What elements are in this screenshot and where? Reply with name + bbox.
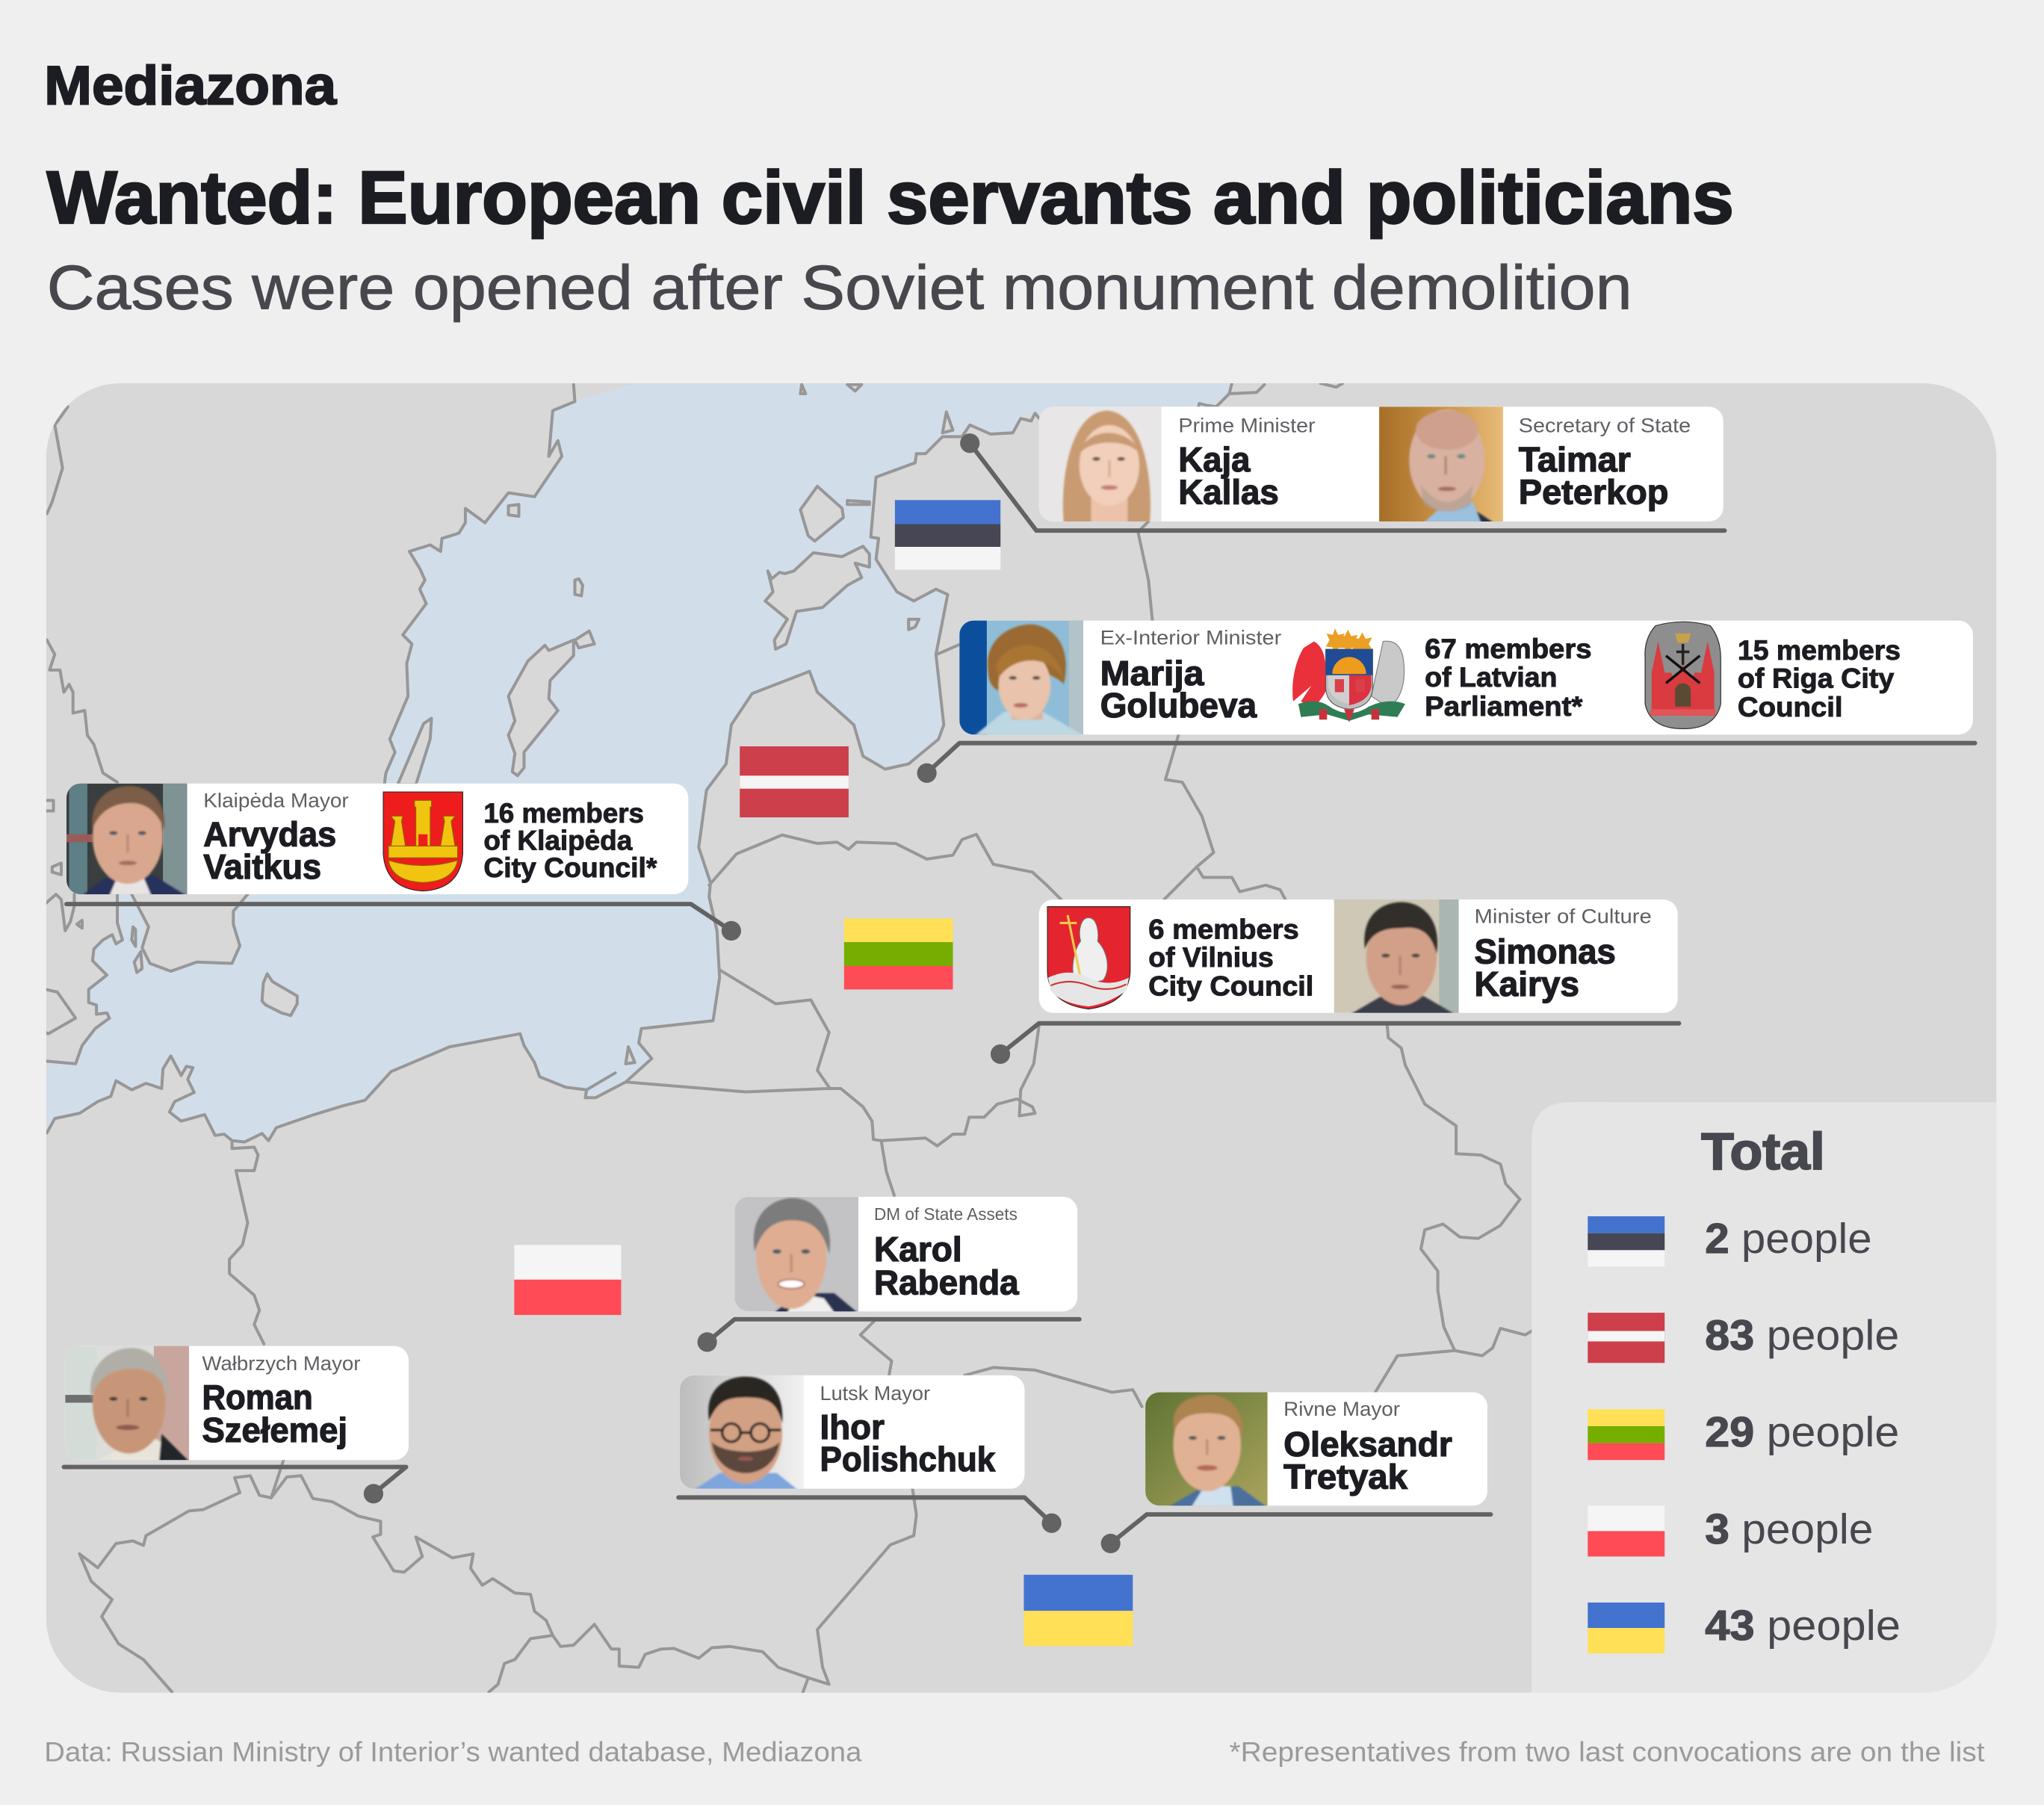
name: Arvydas Vaitkus: Arvydas — [203, 814, 336, 853]
flag on map: Ukraine — [1023, 1575, 1133, 1646]
text: 67 members of Latvian Parliament — [1425, 634, 1592, 722]
card: Lithuania Vilnius officials — [1039, 900, 1678, 1015]
photo: Taimar Peterkop — [1379, 406, 1503, 523]
name: Kaja Kallas: Kaja — [1178, 440, 1251, 479]
card: Latvia officials — [959, 621, 1973, 735]
role: Klaipeda Mayor: Klaipėda Mayor — [203, 790, 349, 812]
name: Roman Szelemej: Szełemej — [202, 1411, 347, 1449]
text: 15 members of Riga City Council: of Riga City — [1738, 663, 1895, 694]
photo: Kaja Kallas — [1039, 406, 1162, 523]
legend heading: Total — [1701, 1122, 1825, 1180]
icon: Vilnius coat of arms — [1047, 907, 1130, 1009]
text: 16 members of Klaipeda City Council: of Klaipėda — [483, 826, 633, 856]
role: Prime Minister: Prime Minister — [1178, 414, 1316, 436]
photo: Arvydas Vaitkus — [66, 784, 187, 896]
text: 15 members of Riga City Council: Council — [1738, 692, 1843, 722]
title: Wanted: European civil servants and politicians — [47, 156, 1734, 239]
name: Marija Golubeva: Golubeva — [1100, 686, 1257, 725]
leader line: Ihor Polishchuk — [678, 1497, 1062, 1533]
name: Karol Rabenda: Rabenda — [874, 1263, 1019, 1301]
legend row: Estonia — [1588, 1216, 1872, 1266]
name: Arvydas Vaitkus — [203, 814, 336, 886]
flag on map: Latvia — [740, 746, 849, 817]
photo: Oleksandr Tretyak — [1145, 1393, 1268, 1507]
role: Walbrzych Mayor: Wałbrzych Mayor — [202, 1352, 360, 1375]
name: Arvydas Vaitkus: Vaitkus — [203, 847, 321, 886]
name: Karol Rabenda — [874, 1230, 1019, 1301]
name: Ihor Polishchuk: Ihor — [820, 1408, 885, 1446]
name: Simonas Kairys: Simonas — [1474, 932, 1616, 970]
name: Taimar Peterkop: Peterkop — [1519, 472, 1668, 511]
name: Taimar Peterkop: Taimar — [1519, 440, 1631, 479]
legend row: Estonia: 2 people — [1705, 1216, 1872, 1263]
legend row: Ukraine: 43 people — [1705, 1603, 1901, 1650]
name: Kaja Kallas — [1178, 440, 1279, 511]
islands — [52, 385, 953, 1064]
Baltic sea — [47, 383, 1232, 1142]
footer: source: Data: Russian Ministry of Interior’s wanted database, Mediazona — [44, 1736, 862, 1767]
name: Ihor Polishchuk: Polishchuk — [820, 1440, 996, 1479]
role: DM of State Assets: DM of State Assets — [874, 1204, 1018, 1224]
name: Roman Szelemej — [202, 1378, 347, 1449]
name: Marija Golubeva — [1100, 654, 1257, 725]
legend panel: Total — [1532, 1102, 1998, 1694]
name: Kaja Kallas: Kallas — [1178, 472, 1279, 511]
text: 15 members of Riga City Council: 15 members — [1738, 635, 1901, 666]
card: Klaipeda officials — [66, 784, 688, 896]
card: Roman Szelemej — [65, 1346, 409, 1461]
name: Taimar Peterkop — [1519, 440, 1668, 511]
text: 6 members of Vilnius City Council: of Vilnius — [1148, 942, 1274, 973]
role: Rivne Mayor: Rivne Mayor — [1283, 1398, 1400, 1420]
legend row: Lithuania — [1588, 1409, 1899, 1460]
photo: Roman Szelemej — [65, 1346, 189, 1461]
text: 67 members of Latvian Parliament: of Latvian — [1425, 662, 1557, 693]
role: Secretary of State: Secretary of State — [1519, 414, 1691, 436]
map panel — [46, 383, 1998, 1694]
leader line: Klaipeda — [66, 904, 741, 941]
name: Roman Szelemej: Roman — [202, 1378, 313, 1417]
flag on map: Lithuania — [844, 918, 953, 989]
footer: note: *Representatives from two last convocations are on the list — [1229, 1736, 1985, 1767]
legend row: Ukraine — [1588, 1603, 1901, 1653]
role: Minister of Culture: Minister of Culture — [1474, 905, 1652, 927]
text: 67 members of Latvian Parliament: 67 members — [1425, 634, 1592, 664]
name: Karol Rabenda: Karol — [874, 1230, 962, 1269]
photo: Karol Rabenda — [734, 1197, 858, 1313]
leader line: Estonia — [960, 433, 1724, 530]
legend row: Poland — [1588, 1505, 1873, 1556]
photo: Simonas Kairys — [1334, 900, 1459, 1015]
flag on map: Poland — [514, 1245, 621, 1315]
leader line: Roman Szelemej — [64, 1467, 406, 1503]
leader line: Latvia — [917, 743, 1975, 783]
photo: Marija Golubeva — [959, 621, 1083, 735]
text: 67 members of Latvian Parliament: Parliament* — [1425, 691, 1583, 722]
card: Ihor Polishchuk — [680, 1375, 1024, 1490]
text: 6 members of Vilnius City Council: 6 members — [1148, 914, 1299, 944]
leader line: Oleksandr Tretyak — [1101, 1514, 1490, 1553]
photo: Ihor Polishchuk — [680, 1375, 804, 1490]
leader line: Vilnius — [991, 1024, 1679, 1064]
name: Simonas Kairys: Kairys — [1474, 965, 1579, 1003]
name: Oleksandr Tretyak — [1283, 1425, 1452, 1496]
coastlines and borders — [46, 383, 1532, 1692]
legend row: Lithuania: 29 people — [1705, 1409, 1899, 1456]
logo: Mediazona: Mediazona — [44, 55, 337, 117]
icon: Riga coat of arms — [1645, 622, 1721, 728]
card: Estonia officials — [1039, 406, 1724, 523]
icon: Latvian coat of arms — [1292, 628, 1405, 722]
role: Ex-Interior Minister: Ex-Interior Minister — [1100, 627, 1281, 649]
text: 15 members of Riga City Council — [1738, 635, 1901, 722]
text: 6 members of Vilnius City Council: City Council — [1148, 971, 1313, 1002]
flag on map: Estonia — [895, 500, 1000, 570]
card: Oleksandr Tretyak — [1145, 1393, 1487, 1507]
text: 16 members of Klaipeda City Council — [483, 798, 657, 883]
name: Oleksandr Tretyak: Oleksandr — [1283, 1425, 1452, 1464]
icon: Klaipeda coat of arms — [383, 792, 462, 891]
leader line: Karol Rabenda — [698, 1319, 1080, 1352]
role: Lutsk Mayor: Lutsk Mayor — [820, 1382, 930, 1405]
legend row: Latvia — [1588, 1313, 1899, 1363]
card: Karol Rabenda — [734, 1197, 1077, 1313]
subtitle: Cases were opened after Soviet monument demolition — [47, 253, 1632, 323]
name: Simonas Kairys — [1474, 932, 1616, 1003]
legend row: Latvia: 83 people — [1705, 1313, 1899, 1360]
name: Marija Golubeva: Marija — [1100, 654, 1204, 693]
text: 16 members of Klaipeda City Council: City Council* — [483, 852, 657, 883]
name: Oleksandr Tretyak: Tretyak — [1283, 1458, 1407, 1496]
name: Ihor Polishchuk — [820, 1408, 996, 1479]
text: 16 members of Klaipeda City Council: 16 members — [483, 798, 644, 829]
text: 6 members of Vilnius City Council — [1148, 914, 1313, 1002]
legend row: Poland: 3 people — [1705, 1506, 1873, 1553]
